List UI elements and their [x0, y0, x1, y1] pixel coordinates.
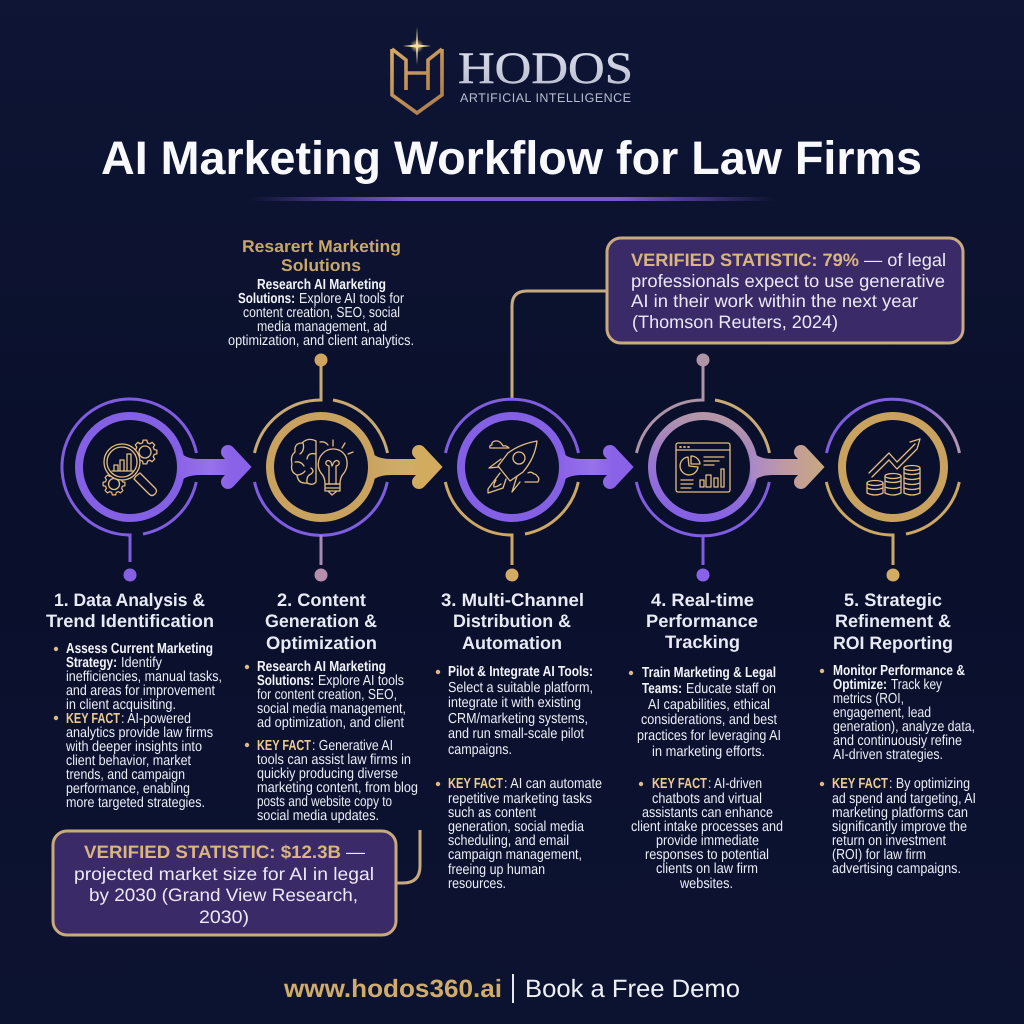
text block 2: KEY FACT — [257, 738, 311, 754]
footer — [283, 974, 740, 1003]
text block 5: engagement, lead — [833, 705, 931, 721]
text block 5: (ROI) for law firm — [832, 847, 926, 863]
heading 1 — [46, 590, 214, 631]
step 3 outer ring — [445, 399, 578, 565]
statistic text: VERIFIED STATISTIC: $12.3B — [84, 842, 341, 862]
step 4 node — [636, 354, 815, 582]
callout text: Research AI Marketing — [257, 277, 386, 293]
text block 1: analytics provide law firms — [66, 725, 213, 741]
text block 5: Track key — [891, 677, 943, 693]
footer call to action: Book a Free Demo — [525, 975, 740, 1003]
inner ring — [79, 416, 181, 518]
column 5 — [820, 590, 976, 877]
text block 4: assistants can enhance — [642, 805, 773, 821]
text block 1: Identify — [121, 655, 163, 671]
text block 5: KEY FACT — [832, 776, 888, 792]
statistic box — [607, 238, 963, 343]
step 3 dot — [506, 568, 518, 582]
text block 1: : AI-powered — [121, 711, 191, 727]
text block 4: KEY FACT — [652, 776, 707, 792]
text block 3: resources. — [448, 876, 506, 892]
heading 5 — [833, 590, 953, 653]
panel: statistic 79% — [512, 238, 963, 400]
column 4 — [629, 590, 783, 892]
text block 3: integrate it with existing — [448, 695, 581, 711]
step 2 bottom dot — [314, 568, 328, 582]
text block 1: KEY FACT — [66, 711, 120, 727]
heading 3: Distribution & — [453, 611, 571, 631]
text block 5: and continuousiy refine — [833, 733, 962, 749]
text block 2: : Generative AI — [312, 738, 393, 754]
text block 4: Train Marketing & Legal — [642, 665, 776, 681]
statistic text: VERIFIED STATISTIC: 79% — [631, 250, 859, 270]
step 5 inner ring — [842, 416, 944, 518]
text block 2 — [245, 659, 418, 824]
heading 3: 3. Multi-Channel — [441, 590, 584, 610]
text block 3: Pilot & Integrate AI Tools: — [448, 664, 593, 680]
heading 3 — [441, 590, 584, 653]
text block 5: ad spend and targeting, AI — [832, 791, 976, 807]
text block 3: freeing up human — [448, 862, 545, 878]
text block 3: : AI can automate — [504, 776, 602, 792]
text block 5: : By optimizing — [889, 776, 970, 792]
text block 1 — [54, 641, 222, 811]
logo shield — [392, 49, 442, 113]
step 2 arrow — [369, 450, 433, 484]
text block 4: websites. — [679, 876, 733, 892]
heading 5: 5. Strategic — [844, 590, 942, 610]
text block 1: and areas for improvement — [66, 683, 215, 699]
logo star — [403, 27, 431, 65]
heading 3: Automation — [462, 633, 562, 653]
panel: research callout above step 2 — [228, 237, 414, 349]
text block 3: such as content — [448, 805, 536, 821]
text block 4: client intake processes and — [631, 819, 783, 835]
text block 3: Select a suitable platform, — [448, 680, 593, 696]
text block 2: social media updates. — [257, 808, 379, 824]
callout heading — [242, 237, 401, 275]
step 5 outer ring — [826, 399, 960, 565]
step 2 outer ring group — [254, 354, 388, 565]
text block 3 — [436, 664, 602, 892]
text block 2: Solutions: — [257, 673, 314, 689]
text block 5: advertising campaigns. — [832, 861, 961, 877]
text block 4: : AI-driven — [708, 776, 762, 792]
callout text: Solutions: — [238, 291, 295, 307]
heading 5: ROI Reporting — [833, 633, 953, 653]
text block 1: in client acquisiting. — [66, 697, 176, 713]
text block 4: chatbots and virtual — [652, 791, 762, 807]
text block 1: Strategy: — [66, 655, 117, 671]
text block 2: social media management, — [257, 701, 406, 717]
text block 1: Assess Current Marketing — [66, 641, 213, 657]
step 4 outer ring — [636, 366, 770, 565]
text block 3: repetitive marketing tasks — [448, 791, 592, 807]
text block 1: with deeper insights into — [65, 739, 202, 755]
text block 2: for content creation, SEO, — [257, 687, 397, 703]
statistic text: professionals expect to use generative — [631, 271, 945, 291]
column 2 — [245, 590, 418, 824]
heading 4: Performance — [646, 611, 758, 631]
heading 4 — [646, 590, 758, 652]
text block 5: marketing platforms can — [832, 805, 968, 821]
connector to step 3 — [512, 291, 607, 400]
text block 2: tools can assist law firms in — [257, 752, 411, 768]
heading 2: 2. Content — [277, 590, 366, 610]
step 4 inner ring — [652, 416, 754, 518]
text block 5: significantly improve the — [832, 819, 967, 835]
step 3 node — [445, 399, 624, 582]
logo tagline: ARTIFICIAL INTELLIGENCE — [460, 91, 631, 105]
text block 4: Educate staff on — [686, 681, 776, 697]
heading 2: Optimization — [266, 633, 377, 653]
text block 3: and run small-scale pilot — [448, 726, 584, 742]
text block 3: CRM/marketing systems, — [448, 711, 588, 727]
text block 2: marketing content, from blog — [257, 780, 418, 796]
statistic text: (Thomson Reuters, 2024) — [632, 312, 838, 332]
text block 4: provide immediate — [656, 833, 759, 849]
text block 1: inefficiencies, manual tasks, — [66, 669, 222, 685]
text block 1: more targeted strategies. — [66, 795, 205, 811]
text block 4: considerations, and best — [641, 712, 777, 728]
statistic box — [53, 831, 396, 935]
text block 5: return on investment — [832, 833, 946, 849]
statistic text: projected market size for AI in legal — [74, 864, 374, 884]
icon: analytics dashboard — [676, 443, 730, 492]
icon: rocket — [488, 441, 539, 493]
step 5 dot — [886, 568, 900, 582]
text block 2: quickiy producing diverse — [257, 766, 398, 782]
text block 3: KEY FACT — [448, 776, 503, 792]
heading 4: 4. Real-time — [651, 590, 754, 610]
footer separator — [512, 974, 514, 1003]
callout text: content creation, SEO, social — [243, 305, 400, 321]
outer ring — [62, 399, 196, 562]
text block 5 — [820, 663, 976, 877]
text block 1: client behavior, market — [66, 753, 191, 769]
statistic text: 2030) — [199, 907, 249, 927]
step 1 node — [62, 399, 242, 582]
step 2 inner ring — [270, 416, 372, 518]
icon: growth arrow and coins — [867, 439, 920, 495]
heading 2 — [265, 590, 377, 653]
step 2 outer ring — [254, 378, 388, 565]
callout heading: Solutions — [281, 256, 361, 275]
footer url: www.hodos360.ai — [283, 975, 502, 1003]
step 2 stem — [320, 366, 322, 380]
text block 2: ad optimization, and client — [257, 715, 404, 731]
callout text — [228, 277, 414, 349]
text block 4: practices for leveraging AI — [637, 728, 781, 744]
connector dot — [124, 568, 136, 582]
text block 2: posts and website copy to — [257, 794, 392, 810]
step 3 inner ring — [461, 416, 563, 518]
connector to column 2 — [396, 830, 420, 883]
statistic text: AI in their work within the next year — [631, 291, 918, 311]
text block 2: Explore AI tools — [318, 673, 404, 689]
heading 1: 1. Data Analysis & — [54, 590, 205, 610]
text block 4 — [629, 665, 783, 892]
text block 3: scheduling, and email — [448, 833, 569, 849]
panel: statistic $12.3B — [53, 830, 420, 935]
step 3 arrow — [560, 450, 624, 484]
title: AI Marketing Workflow for Law Firms — [101, 131, 922, 184]
text block 1: trends, and campaign — [66, 767, 185, 783]
logo wordmark: HODOS — [458, 43, 633, 93]
arrow — [178, 450, 242, 484]
heading 1: Trend Identification — [46, 611, 214, 631]
column 1 — [46, 590, 222, 811]
text block 5: metrics (ROI, — [833, 691, 904, 707]
statistic text: by 2030 (Grand View Research, — [89, 885, 358, 905]
text block 1: performance, enabling — [66, 781, 190, 797]
text block 4: AI capabilities, ethical — [648, 697, 770, 713]
column 3 — [436, 590, 602, 892]
statistic text — [631, 250, 946, 332]
text block 2: Research AI Marketing — [257, 659, 386, 675]
statistic text — [74, 842, 374, 927]
statistic text: — — [346, 842, 365, 862]
step 4 arrow — [751, 450, 815, 484]
step 2 top dot — [314, 354, 328, 366]
step 4 top dot — [696, 354, 710, 366]
heading 4: Tracking — [665, 632, 740, 652]
icon: brain and light bulb — [291, 439, 353, 495]
text block 4: clients on law firm — [656, 861, 758, 877]
heading 5: Refinement & — [835, 611, 951, 631]
logo — [392, 27, 633, 113]
text block 3: generation, social media — [448, 819, 585, 835]
icon: magnifier with chart and gears — [103, 440, 157, 496]
text block 5: Optimize: — [833, 677, 887, 693]
callout text: optimization, and client analytics. — [228, 333, 414, 349]
text block 4: responses to potential — [645, 847, 769, 863]
text block 5: generation), analyze data, — [833, 719, 975, 735]
heading 2: Generation & — [265, 611, 377, 631]
text block 5: AI-driven strategies. — [833, 747, 943, 763]
statistic text: — of legal — [864, 250, 946, 270]
step 4 bottom dot — [696, 568, 710, 582]
callout text: media management, ad — [257, 319, 387, 335]
step 2 node — [270, 366, 433, 582]
callout heading: Resarert Marketing — [242, 237, 401, 256]
text block 3: campaigns. — [448, 742, 512, 758]
text block 4: Teams: — [642, 681, 682, 697]
text block 5: Monitor Performance & — [833, 663, 965, 679]
step 5 node — [826, 399, 960, 582]
callout text: Explore AI tools for — [299, 291, 404, 307]
text block 4: in marketing efforts. — [652, 744, 765, 760]
text block 3: campaign management, — [448, 847, 582, 863]
